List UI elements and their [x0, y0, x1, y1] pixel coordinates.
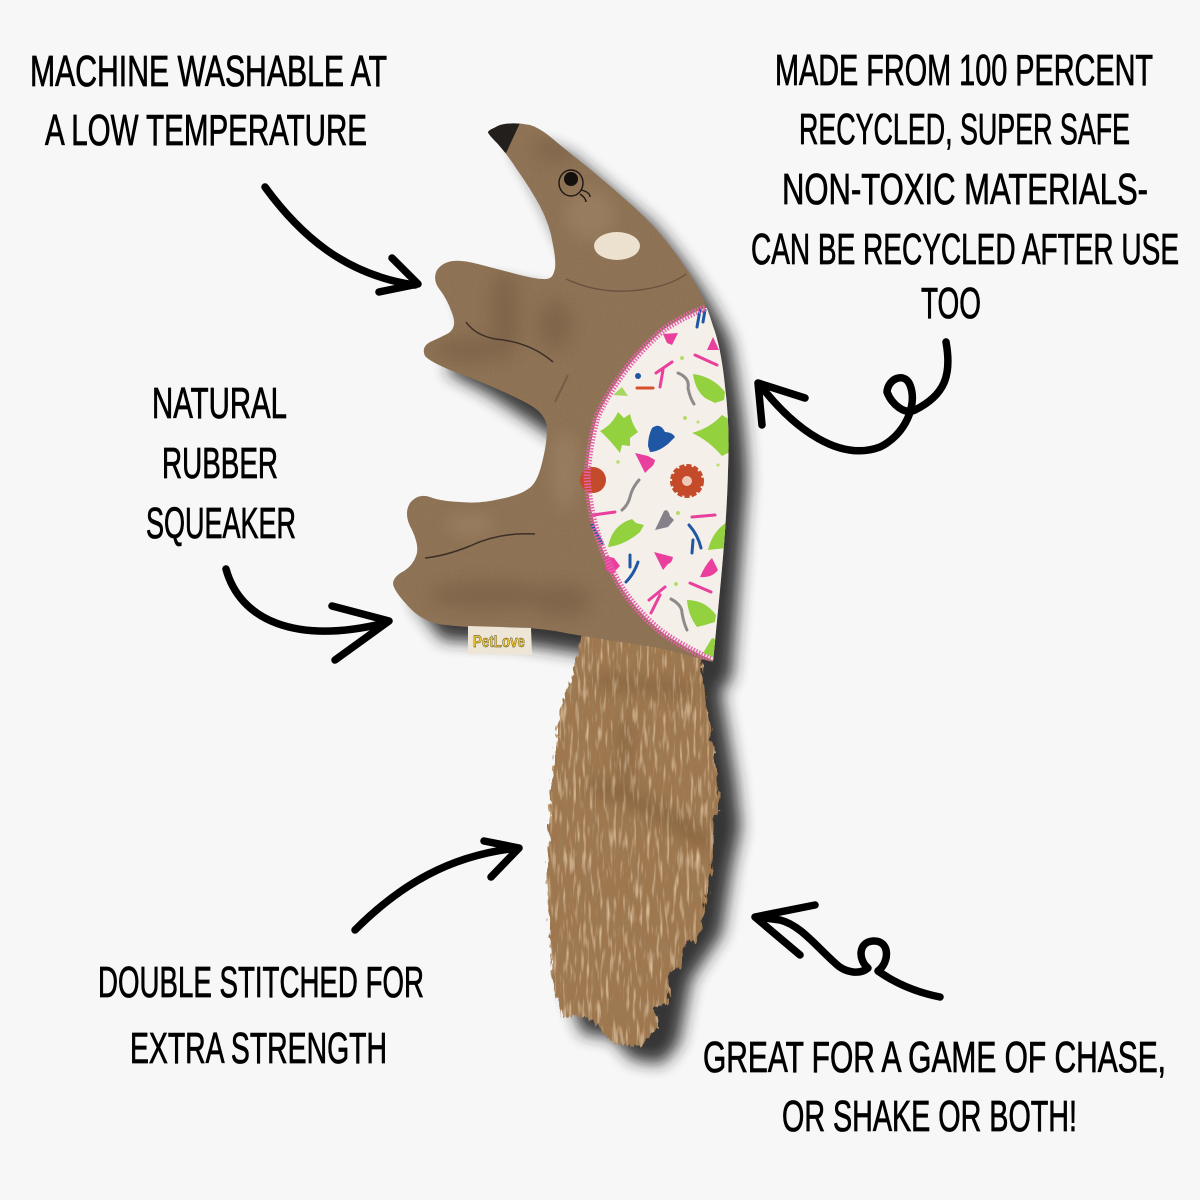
text: double stitched: EXTRA STRENGTH — [130, 1024, 387, 1073]
green leaves — [600, 374, 730, 658]
blue dot — [635, 373, 641, 379]
fur tail — [547, 630, 720, 1047]
felt body — [393, 123, 729, 662]
text: recycled materials: TOO — [921, 279, 981, 328]
arrow: washable to toy — [265, 187, 418, 292]
text: rubber squeaker: RUBBER — [162, 439, 278, 488]
text: rubber squeaker: SQUEAKER — [146, 499, 296, 548]
pupil — [564, 172, 578, 186]
arrow: chase to tail — [755, 905, 940, 997]
seam crease — [555, 375, 568, 402]
neck seam — [566, 274, 686, 291]
felt base — [393, 123, 729, 662]
nose — [488, 123, 520, 153]
half flower — [580, 467, 606, 493]
text: chase or shake — [703, 1033, 1166, 1141]
red flower — [672, 466, 702, 496]
text: double stitched — [98, 958, 424, 1073]
text: rubber squeaker: NATURAL — [152, 379, 287, 428]
lashes — [580, 190, 590, 202]
stitched pink edge — [587, 308, 712, 660]
blue heart — [648, 426, 675, 452]
tail dark bands — [590, 680, 708, 845]
lighter felt patches — [458, 196, 609, 532]
arrow: squeaker to toy — [226, 569, 389, 660]
small green dots — [616, 356, 720, 586]
brand tag — [468, 626, 532, 655]
pink hearts — [606, 333, 719, 577]
toy: anteater plush — [380, 110, 747, 1064]
fabric panel — [588, 308, 729, 660]
text: machine washable: MACHINE WASHABLE AT — [30, 47, 387, 96]
text: rubber squeaker — [146, 379, 296, 548]
text: recycled materials — [751, 46, 1179, 328]
text: machine washable: A LOW TEMPERATURE — [45, 106, 367, 155]
arrow: recycled to toy — [758, 342, 948, 451]
cheek patch — [594, 232, 640, 260]
tag text: PetLove — [473, 632, 525, 651]
text: machine washable — [30, 47, 387, 155]
eye ring — [559, 170, 583, 196]
grey heart — [655, 510, 674, 530]
dashes — [592, 310, 717, 630]
arrow: stitched to tail — [355, 841, 519, 930]
leg seam lines — [425, 322, 553, 558]
text: double stitched: DOUBLE STITCHED FOR — [98, 958, 424, 1007]
tag background — [468, 626, 532, 655]
eye — [559, 170, 590, 202]
panel: floral pattern belly — [580, 308, 745, 660]
felt darker mottling — [430, 140, 590, 616]
flower centre — [682, 476, 692, 486]
toy drop shadow — [413, 144, 747, 1064]
